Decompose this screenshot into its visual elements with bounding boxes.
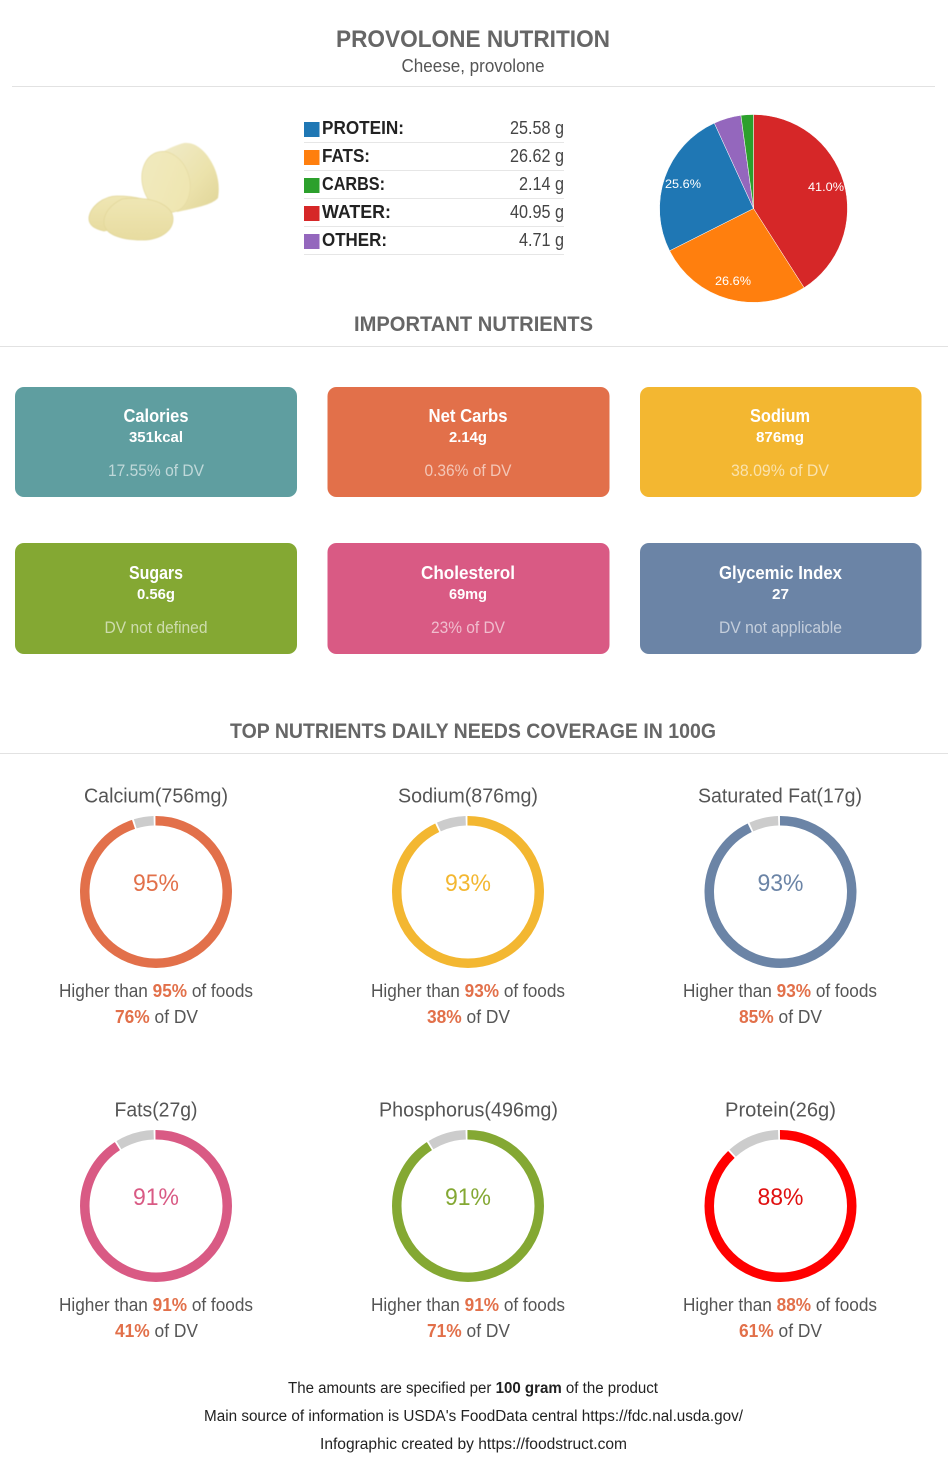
other row xyxy=(304,230,564,250)
footer notes: Main source of information is USDA's FoodData central https://fdc.nal.usda.gov/ xyxy=(204,1408,744,1425)
gauge: saturated fat: Higher than 93% of foods xyxy=(683,981,877,1001)
card: calories xyxy=(15,387,297,497)
gauge: protein: 61% of DV xyxy=(739,1321,822,1341)
heading: top nutrients coverage: TOP NUTRIENTS DAILY NEEDS COVERAGE IN 100G xyxy=(230,720,716,743)
gauge: phosphorus: 71% of DV xyxy=(427,1321,510,1341)
water row: WATER: xyxy=(322,202,391,222)
card: glycemic index: 27 xyxy=(772,586,789,603)
gauge: fats: Higher than 91% of foods xyxy=(59,1295,253,1315)
gauge: fats: Fats(27g) xyxy=(114,1100,198,1122)
gauge: sodium: Higher than 93% of foods xyxy=(371,981,565,1001)
gauge: saturated fat xyxy=(683,786,877,1027)
footer notes xyxy=(204,1380,744,1453)
gauge: sodium: 38% of DV xyxy=(427,1007,510,1027)
card: glycemic index: DV not applicable xyxy=(719,618,842,637)
gauge: sodium: 93% xyxy=(445,870,491,897)
carbs row: 2.14 g xyxy=(519,174,564,194)
icon: provolone cheese xyxy=(89,143,219,240)
protein row xyxy=(304,118,564,138)
fats row: 26.62 g xyxy=(510,146,564,166)
protein row: 25.58 g xyxy=(510,118,564,138)
card: cholesterol: Cholesterol xyxy=(421,563,515,583)
gauge: saturated fat: Saturated Fat(17g) xyxy=(698,786,862,808)
card: sugars: DV not defined xyxy=(104,618,208,637)
gauge: protein: Higher than 88% of foods xyxy=(683,1295,877,1315)
gauge: fats xyxy=(59,1100,253,1341)
carbs row xyxy=(304,174,564,194)
card: sugars: 0.56g xyxy=(137,586,175,603)
gauge: phosphorus: Higher than 91% of foods xyxy=(371,1295,565,1315)
card: glycemic index: Glycemic Index xyxy=(719,563,842,583)
card: sodium: Sodium xyxy=(750,406,810,426)
card: net carbs: 0.36% of DV xyxy=(424,461,512,480)
card: calories: Calories xyxy=(124,406,188,426)
card: sugars: Sugars xyxy=(129,563,183,583)
card: calories: 17.55% of DV xyxy=(108,461,205,480)
gauge: protein: 88% xyxy=(758,1184,804,1211)
fats row: FATS: xyxy=(322,146,370,166)
gauge: sodium: Sodium(876mg) xyxy=(398,786,538,808)
card: sodium: 38.09% of DV xyxy=(731,461,830,480)
gauge: phosphorus xyxy=(371,1100,565,1341)
gauge: calcium xyxy=(59,786,253,1027)
footer notes: The amounts are specified per 100 gram of the product xyxy=(288,1380,659,1397)
carbs row: CARBS: xyxy=(322,174,385,194)
card: glycemic index xyxy=(640,543,922,654)
fats row xyxy=(304,146,564,166)
card: sugars xyxy=(15,543,297,654)
pie chart: 41.0% xyxy=(808,180,844,194)
card: cholesterol: 23% of DV xyxy=(431,618,506,637)
subtitle: Cheese, provolone xyxy=(402,56,544,76)
gauge: calcium: Higher than 95% of foods xyxy=(59,981,253,1001)
gauge: calcium: Calcium(756mg) xyxy=(84,786,228,808)
other row: OTHER: xyxy=(322,230,387,250)
gauge: phosphorus: 91% xyxy=(445,1184,491,1211)
gauge: saturated fat: 93% xyxy=(758,870,804,897)
pie chart xyxy=(660,114,847,302)
card: net carbs: 2.14g xyxy=(449,429,487,446)
pie chart: 25.6% xyxy=(665,177,701,191)
gauge: fats: 91% xyxy=(133,1184,179,1211)
gauge: phosphorus: Phosphorus(496mg) xyxy=(379,1100,558,1122)
other row: 4.71 g xyxy=(519,230,564,250)
gauge: protein xyxy=(683,1100,877,1341)
card: net carbs: Net Carbs xyxy=(428,406,508,426)
gauge: calcium: 76% of DV xyxy=(115,1007,198,1027)
gauge: sodium xyxy=(371,786,565,1027)
gauge: calcium: 95% xyxy=(133,870,179,897)
card: sodium: 876mg xyxy=(756,429,804,446)
card: cholesterol: 69mg xyxy=(449,586,487,603)
card: sodium xyxy=(640,387,922,497)
card: cholesterol xyxy=(328,543,610,654)
footer notes: Infographic created by https://foodstruct.com xyxy=(320,1436,627,1453)
card: calories: 351kcal xyxy=(129,429,183,446)
title: PROVOLONE NUTRITION xyxy=(336,26,610,53)
macronutrient legend xyxy=(304,118,564,254)
gauge: fats: 41% of DV xyxy=(115,1321,198,1341)
protein row: PROTEIN: xyxy=(322,118,404,138)
water row: 40.95 g xyxy=(510,202,564,222)
gauge: protein: Protein(26g) xyxy=(725,1100,836,1122)
water row xyxy=(304,202,564,222)
card: net carbs xyxy=(328,387,610,497)
gauge: saturated fat: 85% of DV xyxy=(739,1007,822,1027)
pie chart: 26.6% xyxy=(715,274,751,288)
heading: important nutrients: IMPORTANT NUTRIENTS xyxy=(354,313,593,336)
